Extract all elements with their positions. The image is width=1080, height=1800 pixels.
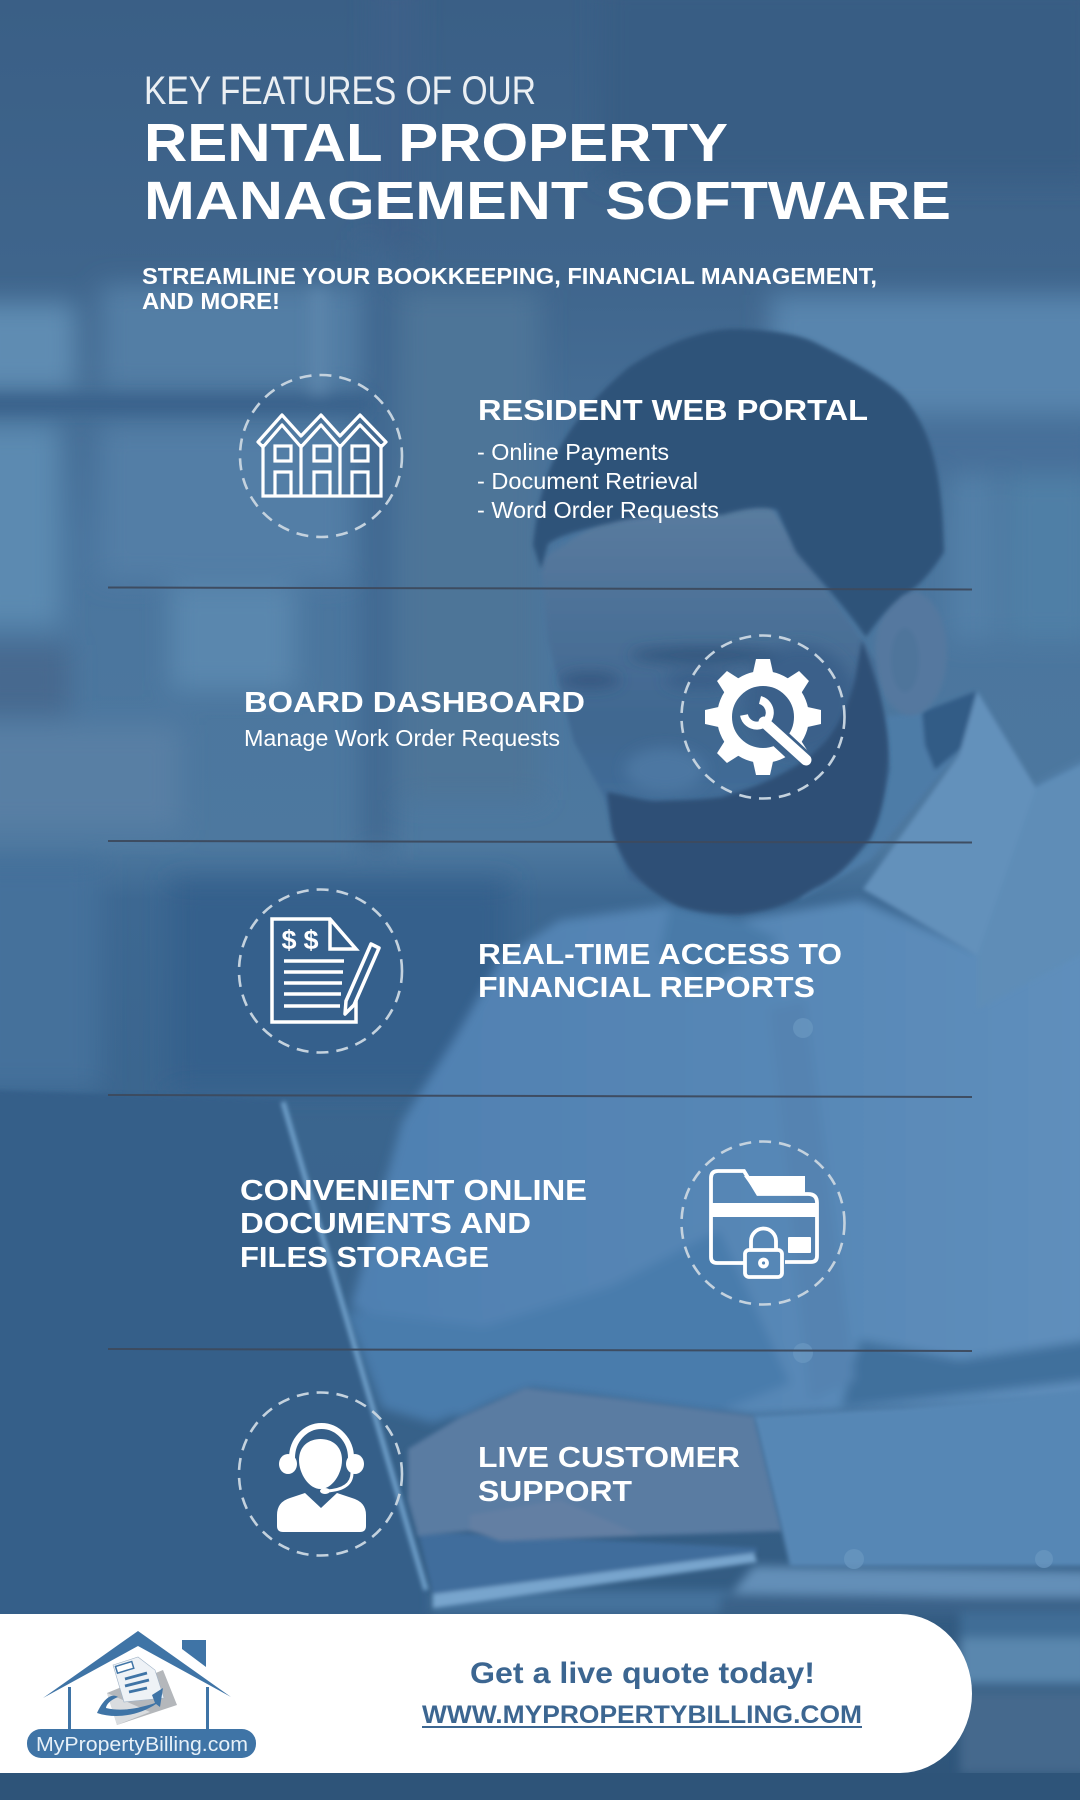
feature 3: real-time access to financial reports: [239, 890, 842, 1052]
icon: folder with padlock: [682, 1142, 844, 1304]
heading: RESIDENT WEB PORTAL: [478, 395, 868, 427]
icon: row houses: [240, 375, 402, 537]
title line 3: MANAGEMENT SOFTWARE: [144, 171, 951, 231]
logo name pill: [27, 1729, 256, 1758]
logo: [27, 1631, 256, 1758]
feature list: - Document Retrieval: [477, 468, 698, 494]
subtitle: [142, 263, 877, 314]
logo envelope: [97, 1657, 177, 1725]
shirt: [346, 760, 1080, 1423]
description: Manage Work Order Requests: [244, 725, 560, 751]
feature 5: live customer support: [239, 1392, 740, 1556]
desk and papers: [430, 1566, 1080, 1774]
heading: FINANCIAL REPORTS: [478, 972, 815, 1004]
icon: gear with wrench: [682, 636, 844, 798]
icon: financial document with pencil: $: [303, 925, 319, 955]
heading: CONVENIENT ONLINE: [240, 1175, 587, 1207]
heading: LIVE CUSTOMER: [478, 1442, 740, 1474]
feature 4: online documents and files storage: [240, 1142, 844, 1304]
logo roof: [43, 1631, 231, 1698]
logo chimney: [182, 1640, 206, 1667]
logo: MyPropertyBilling.com: [36, 1734, 248, 1756]
icon: headset agent: [239, 1392, 402, 1556]
title line 2: RENTAL PROPERTY: [144, 113, 728, 173]
heading: [478, 939, 842, 1004]
icon: financial document with pencil: $: [281, 925, 297, 955]
footer bar: [0, 1614, 972, 1773]
heading: FILES STORAGE: [240, 1242, 489, 1274]
heading: REAL-TIME ACCESS TO: [478, 939, 842, 971]
hand: [408, 1388, 782, 1541]
neck and collar: [800, 691, 1080, 1010]
icon: financial document with pencil: [239, 890, 402, 1052]
title line 1: KEY FEATURES OF OUR: [144, 69, 536, 113]
feature list: - Online Payments: [477, 439, 669, 465]
website link: WWW.MYPROPERTYBILLING.COM: [422, 1701, 862, 1729]
feature list: [477, 439, 719, 523]
beard: [607, 640, 888, 914]
heading: DOCUMENTS AND: [240, 1208, 531, 1240]
left laptop lid: [0, 1090, 428, 1615]
heading: [240, 1175, 587, 1274]
shirt buttons: [793, 1018, 1053, 1569]
subtitle: STREAMLINE YOUR BOOKKEEPING, FINANCIAL MANAGEMENT,: [142, 263, 877, 289]
shirt cuff: [754, 1388, 1080, 1566]
call to action: Get a live quote today!: [470, 1657, 815, 1690]
face: [541, 505, 890, 914]
heading: [478, 1442, 740, 1508]
feature 1: resident web portal: [240, 375, 868, 537]
subtitle: AND MORE!: [142, 288, 280, 314]
feature list: - Word Order Requests: [477, 497, 719, 523]
ear: [875, 591, 947, 715]
heading: SUPPORT: [478, 1476, 632, 1508]
hair: [533, 329, 944, 637]
feature 2: board dashboard: [244, 636, 844, 798]
laptop base and keyboard: [283, 1102, 757, 1608]
heading: BOARD DASHBOARD: [244, 687, 585, 719]
title: [144, 69, 951, 231]
